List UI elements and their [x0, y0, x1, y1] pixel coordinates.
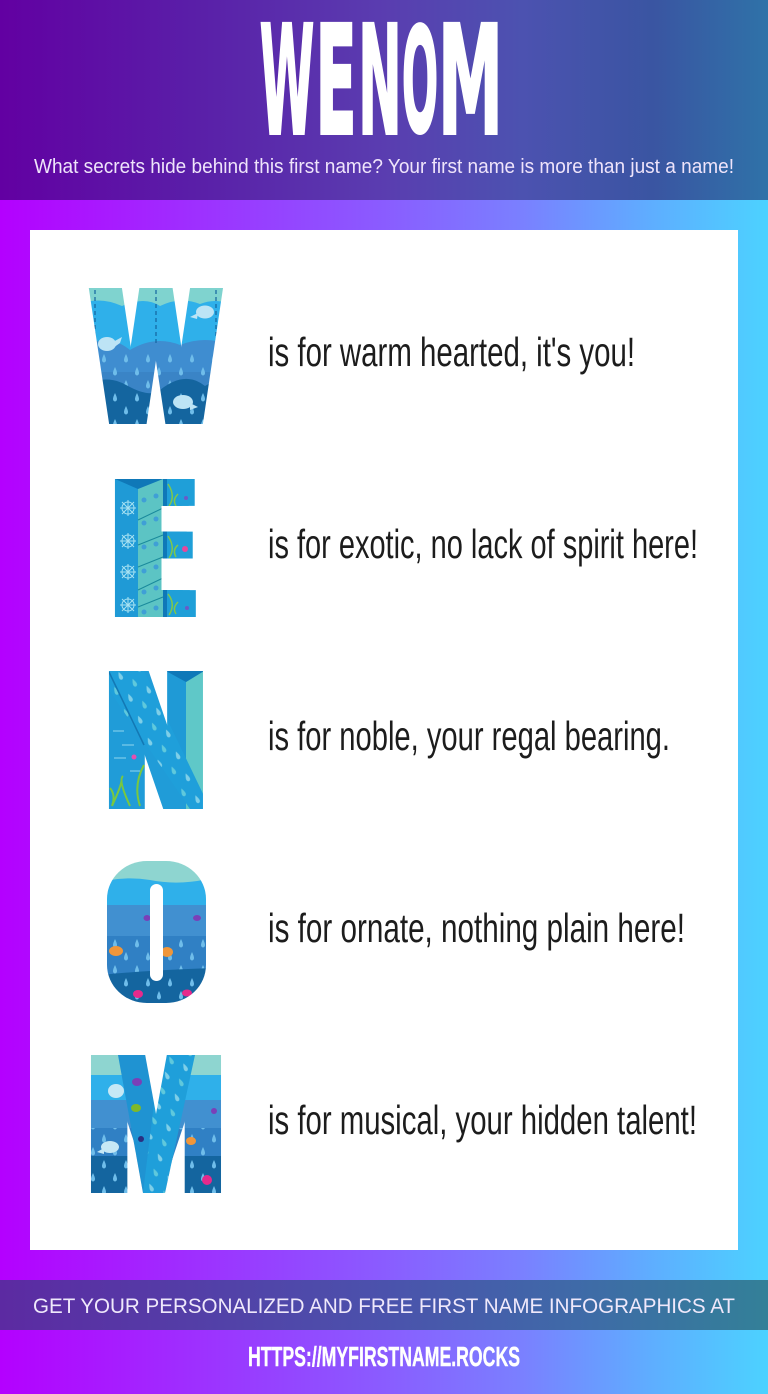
website url: HTTPS://MYFIRSTNAME.ROCKS	[248, 1341, 520, 1372]
fish	[211, 1108, 217, 1114]
whale	[97, 1141, 119, 1154]
fish	[182, 990, 192, 996]
fish	[163, 947, 173, 957]
snowflake	[120, 533, 136, 549]
footer band	[0, 1280, 768, 1330]
title	[260, 0, 503, 170]
subtitle: What secrets hide behind this first name? Your first name is more than just a name!	[34, 156, 734, 178]
pink fish	[132, 754, 136, 760]
snowflake	[120, 500, 136, 516]
line W: is for warm hearted, it's you!	[268, 329, 635, 375]
title: W	[260, 0, 314, 170]
fish	[186, 1137, 196, 1145]
white content panel	[30, 230, 738, 1250]
letter W illustration	[88, 288, 223, 424]
fish	[109, 946, 123, 956]
fish	[133, 990, 143, 998]
letter E illustration	[114, 479, 196, 617]
fish	[138, 1136, 144, 1142]
fish	[132, 1078, 142, 1086]
fish	[202, 1175, 212, 1185]
letter M top notch	[145, 1054, 167, 1114]
snowflake	[120, 597, 136, 613]
snowflake	[120, 564, 136, 580]
footer call to action: GET YOUR PERSONALIZED AND FREE FIRST NAME INFOGRAPHICS AT	[33, 1295, 735, 1318]
whale bottom	[173, 395, 198, 410]
fish	[131, 1104, 141, 1112]
whale top right	[190, 306, 214, 319]
whale	[108, 1084, 124, 1098]
fish	[144, 915, 150, 921]
header band	[0, 0, 768, 200]
fish	[193, 915, 201, 921]
letter O illustration	[107, 861, 206, 1003]
letter M illustration	[91, 1055, 221, 1193]
pink fish	[182, 546, 188, 552]
letter N illustration	[108, 671, 203, 809]
title: O	[402, 0, 438, 167]
whale left	[98, 337, 122, 351]
letter O slit	[150, 884, 163, 981]
